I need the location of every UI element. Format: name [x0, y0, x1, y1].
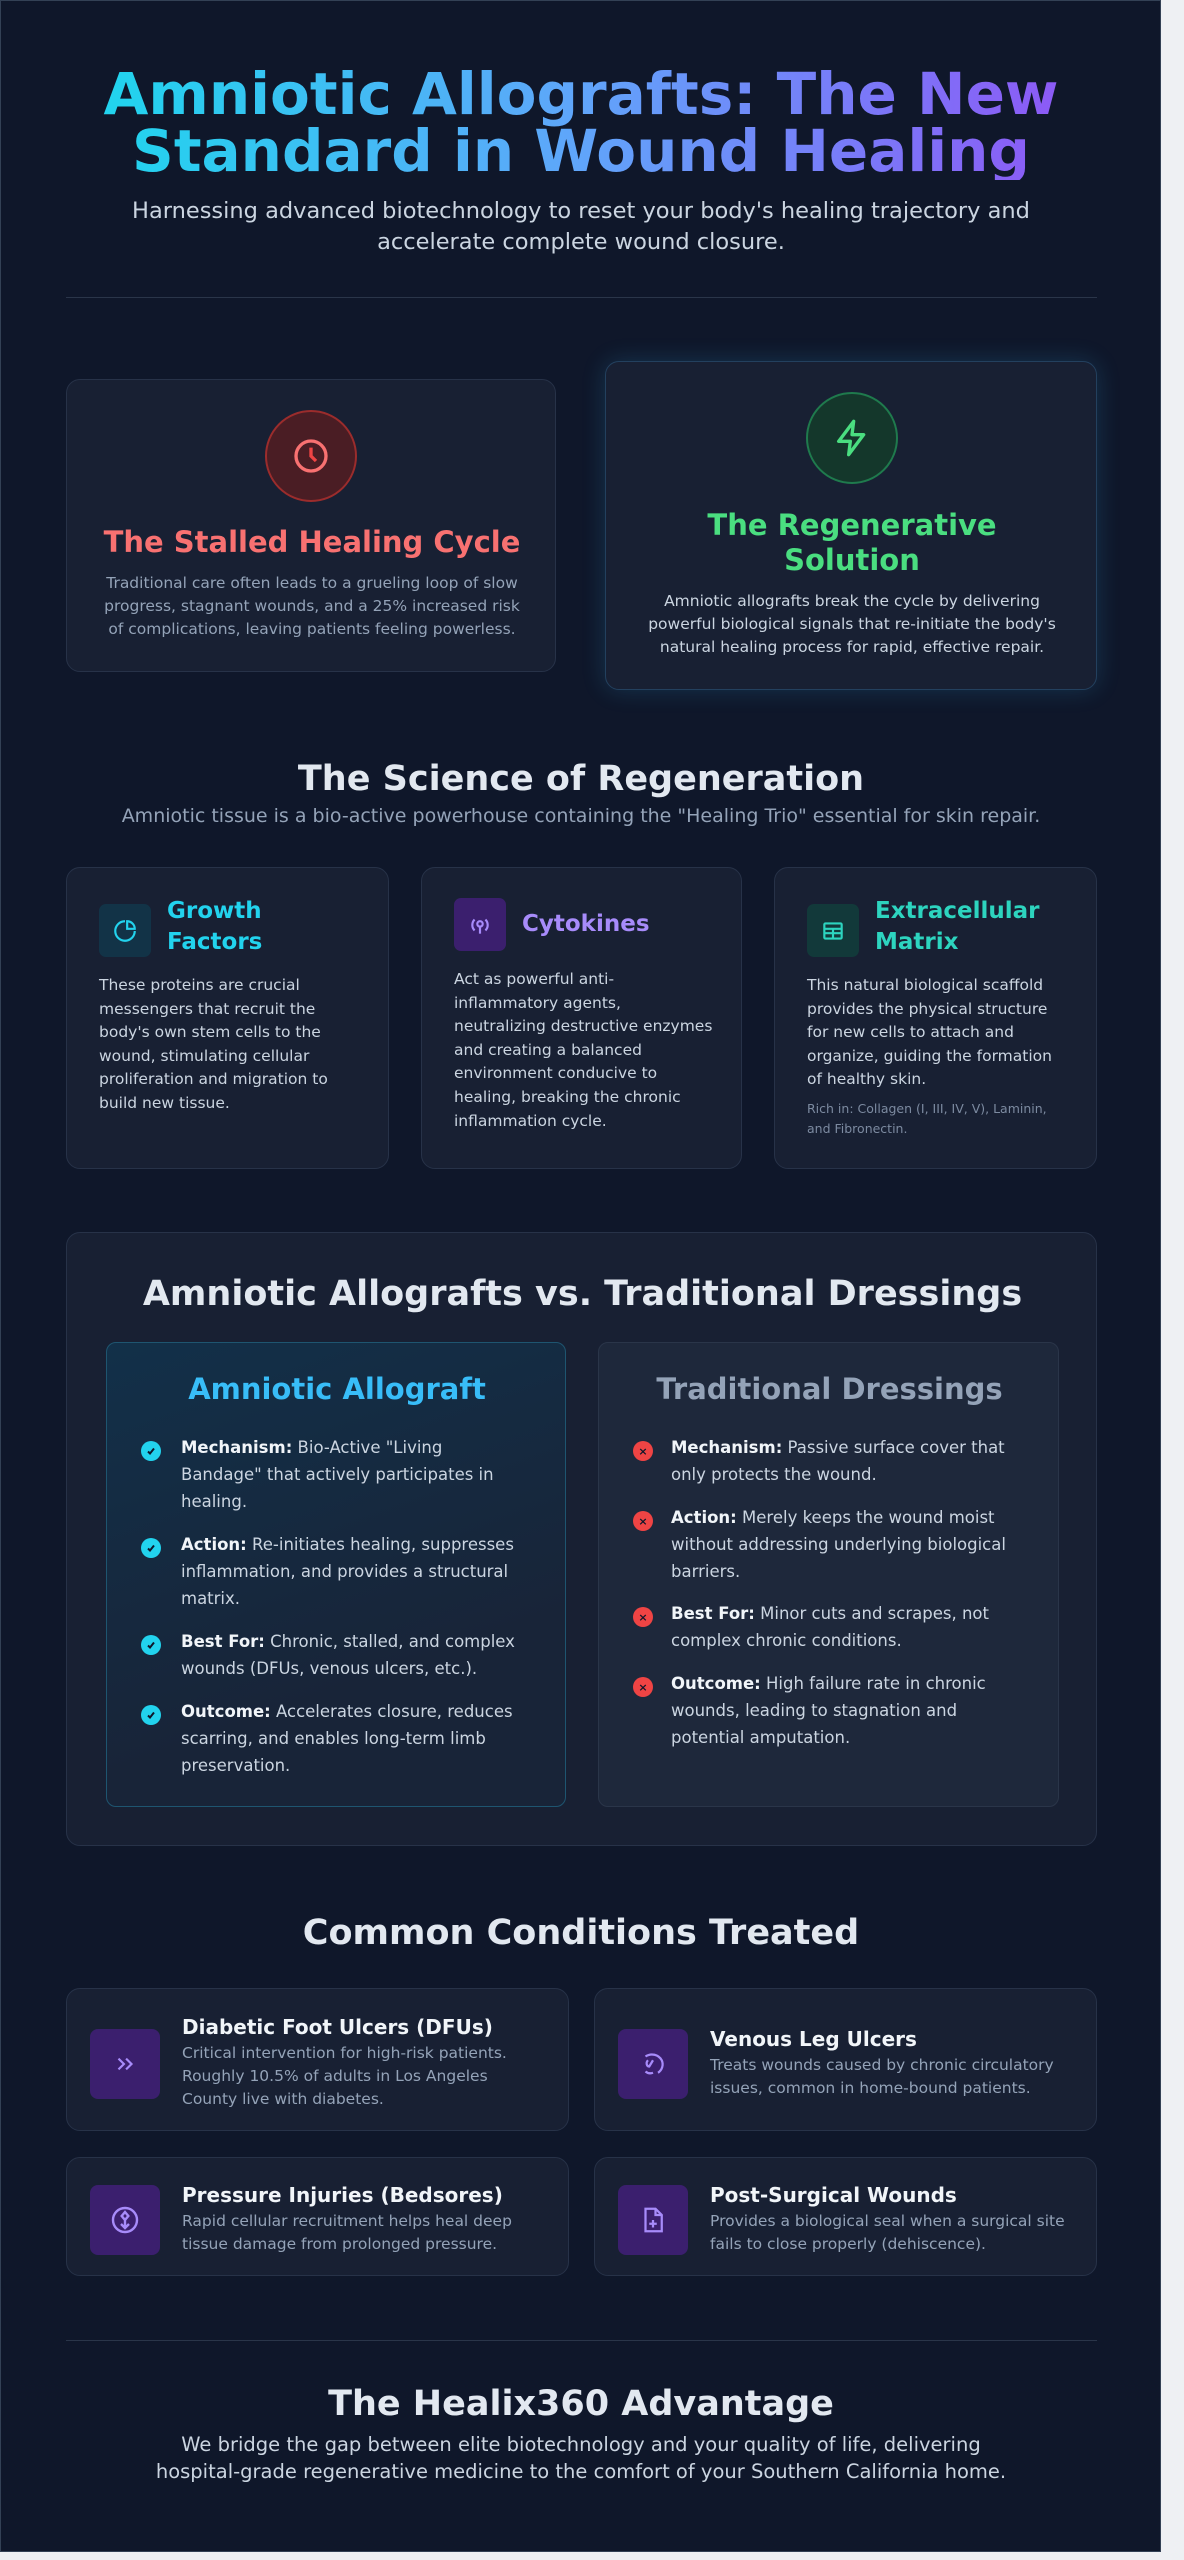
item: healing. [181, 1492, 247, 1511]
text: County live with diabetes. [182, 2090, 384, 2108]
text: Rapid cellular recruitment helps heal deep [182, 2212, 512, 2230]
text: inflammation cycle. [454, 1112, 607, 1130]
text: for new cells to attach and [807, 1023, 1014, 1041]
title [875, 898, 1040, 955]
item [633, 1604, 989, 1650]
text [98, 976, 328, 1112]
item [633, 1508, 1006, 1581]
text: These proteins are crucial [99, 976, 300, 994]
heading: The Stalled Healing Cycle [104, 525, 520, 559]
icon: grid [807, 904, 859, 957]
text: of complications, leaving patients feeling powerless. [108, 620, 516, 638]
heading: Traditional Dressings [656, 1372, 1003, 1406]
icon: circulation [618, 2029, 688, 2099]
heading: Healix360: The Healix360 Advantage [328, 2384, 834, 2424]
heading: Solution [784, 543, 920, 577]
item: only protects the wound. [671, 1465, 877, 1484]
text: closing: We bridge the gap between elite biotechnology and your quality of life, delivering [181, 2433, 981, 2456]
item: preservation. [181, 1756, 290, 1775]
item: inflammation, and provides a structural [181, 1562, 508, 1581]
text: body's own stem cells to the [99, 1023, 321, 1041]
item: Best For: Minor cuts and scrapes, not [671, 1604, 989, 1623]
text [182, 2212, 512, 2253]
title: Diabetic Foot Ulcers (DFUs) [182, 2015, 493, 2039]
text: powerful biological signals that re-initiate the body's [648, 615, 1056, 633]
title: Extracellular [875, 898, 1040, 924]
item [141, 1438, 494, 1511]
heading: Amniotic Allografts vs. Traditional Dressings [143, 1274, 1022, 1314]
item [633, 1674, 986, 1747]
text: tissue damage from prolonged pressure. [182, 2235, 497, 2253]
item: × [638, 1610, 648, 1624]
item: without addressing underlying biological [671, 1535, 1006, 1554]
subtitle: accelerate complete wound closure. [377, 229, 785, 255]
column: traditional dressings [598, 1342, 1059, 1807]
item: matrix. [181, 1589, 240, 1608]
icon: chevrons [90, 2029, 160, 2099]
subheading: Amniotic tissue is a bio-active powerhouse containing the "Healing Trio" essential for skin repair. [122, 805, 1040, 827]
icon: pie [99, 904, 151, 957]
title [167, 898, 262, 955]
text: environment conducive to [454, 1064, 657, 1082]
text: Amniotic allografts break the cycle by delivering [664, 592, 1040, 610]
item: Outcome: Accelerates closure, reduces [181, 1702, 513, 1721]
icon: lightning [806, 392, 898, 484]
subtitle [132, 198, 1030, 255]
text: Traditional care often leads to a grueling loop of slow [106, 574, 518, 592]
item: wounds (DFUs, venous ulcers, etc.). [181, 1659, 477, 1678]
text: healing, breaking the chronic [454, 1088, 681, 1106]
item: Best For: Chronic, stalled, and complex [181, 1632, 515, 1651]
item [633, 1438, 1005, 1484]
text: Roughly 10.5% of adults in Los Angeles [182, 2067, 488, 2085]
title [1, 66, 1161, 180]
title: Factors [167, 929, 262, 955]
panel: stalled healing cycle [66, 379, 556, 672]
heading: science: The Science of Regeneration [298, 759, 864, 799]
note: Rich in: Collagen (I, III, IV, V), Laminin, [807, 1101, 1047, 1116]
title: Standard in Wound Healing [132, 117, 1030, 185]
column: amniotic allograft [106, 1342, 566, 1807]
title: Matrix [875, 929, 958, 955]
card: venous [594, 1988, 1097, 2131]
icon: signal [454, 898, 506, 951]
text: closing: hospital-grade regenerative medicine to the comfort of your Southern California home. [156, 2460, 1006, 2483]
text: proliferation and migration to [99, 1070, 328, 1088]
title: Venous Leg Ulcers [710, 2027, 917, 2051]
heading: Amniotic Allograft [188, 1372, 486, 1406]
text: closing [156, 2433, 1006, 2483]
text: fails to close properly (dehiscence). [710, 2235, 986, 2253]
title: Post-Surgical Wounds [710, 2183, 957, 2207]
text [710, 2212, 1065, 2253]
text: build new tissue. [99, 1094, 230, 1112]
text: Provides a biological seal when a surgical site [710, 2212, 1065, 2230]
item: Action: Re-initiates healing, suppresses [181, 1535, 514, 1554]
text: wound, stimulating cellular [99, 1047, 309, 1065]
item: Mechanism: Bio-Active "Living [181, 1438, 442, 1457]
item: Action: Merely keeps the wound moist [671, 1508, 995, 1527]
text: provides the physical structure [807, 1000, 1047, 1018]
item: × [638, 1514, 648, 1528]
panel: comparison [66, 1232, 1097, 1846]
card: DFU [66, 1988, 569, 2131]
text: organize, guiding the formation [807, 1047, 1052, 1065]
item: scarring, and enables long-term limb [181, 1729, 486, 1748]
note: and Fibronectin. [807, 1120, 907, 1136]
card: pressure [66, 2157, 569, 2276]
item: × [638, 1444, 648, 1458]
subtitle: Harnessing advanced biotechnology to reset your body's healing trajectory and [132, 198, 1030, 224]
panel: cytokines [421, 867, 742, 1169]
note [807, 1101, 1047, 1136]
item: Outcome: High failure rate in chronic [671, 1674, 986, 1693]
item: wounds, leading to stagnation and [671, 1701, 957, 1720]
item: complex chronic conditions. [671, 1631, 902, 1650]
heading: The Regenerative [707, 508, 997, 542]
text [806, 976, 1052, 1088]
text [648, 592, 1056, 656]
icon: anchor circle [90, 2185, 160, 2255]
item: barriers. [671, 1562, 740, 1581]
text: Treats wounds caused by chronic circulatory [710, 2056, 1054, 2074]
text: This natural biological scaffold [807, 976, 1043, 994]
text: Act as powerful anti- [454, 970, 614, 988]
text: of healthy skin. [807, 1070, 926, 1088]
title: Growth [167, 898, 262, 924]
panel: growth factors [66, 867, 389, 1169]
item [141, 1632, 515, 1678]
text [454, 970, 712, 1130]
icon: file plus [618, 2185, 688, 2255]
text [104, 574, 520, 638]
text: and creating a balanced [454, 1041, 642, 1059]
text: natural healing process for rapid, effective repair. [660, 638, 1044, 656]
item [141, 1702, 513, 1775]
panel: extracellular matrix [774, 867, 1097, 1169]
text: messengers that recruit the [99, 1000, 315, 1018]
item: × [638, 1680, 648, 1694]
text: inflammatory agents, [454, 994, 621, 1012]
title: Amniotic Allografts: The New [104, 60, 1058, 128]
item [141, 1535, 514, 1608]
heading [707, 508, 997, 577]
text: Critical intervention for high-risk patients. [182, 2044, 507, 2062]
text: issues, common in home-bound patients. [710, 2079, 1031, 2097]
panel: regenerative solution [605, 361, 1097, 690]
text: neutralizing destructive enzymes [454, 1017, 712, 1035]
item: Mechanism: Passive surface cover that [671, 1438, 1005, 1457]
card: post-surgical [594, 2157, 1097, 2276]
item: Bandage" that actively participates in [181, 1465, 494, 1484]
title: Pressure Injuries (Bedsores) [182, 2183, 503, 2207]
icon: clock [265, 410, 357, 502]
text [182, 2044, 507, 2108]
text [710, 2056, 1054, 2097]
heading: conditions: Common Conditions Treated [303, 1913, 859, 1953]
title: Cytokines [522, 911, 650, 937]
text: progress, stagnant wounds, and a 25% increased risk [104, 597, 520, 615]
item: potential amputation. [671, 1728, 850, 1747]
